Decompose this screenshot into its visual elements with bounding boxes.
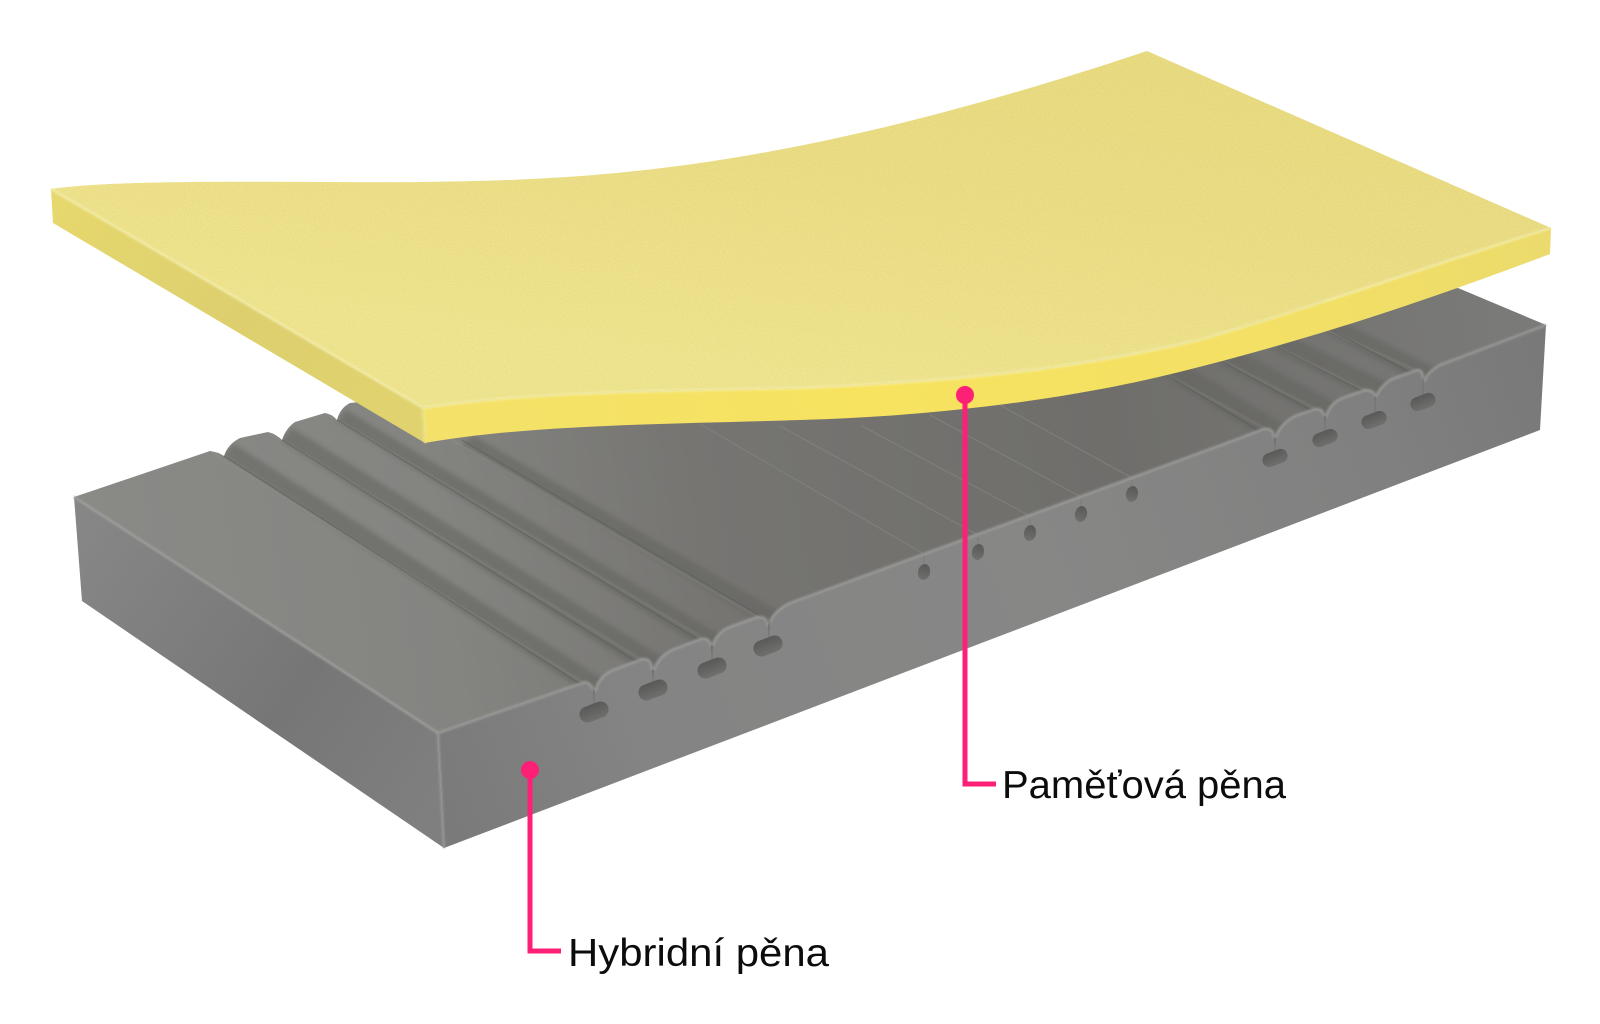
right slots <box>1260 391 1438 469</box>
leader line <box>530 770 561 951</box>
hybrid foam base <box>74 288 1546 848</box>
leader line <box>965 395 996 784</box>
base front face <box>438 325 1546 848</box>
marker dot <box>521 761 539 779</box>
sheet top surface <box>51 51 1551 408</box>
sheet front side <box>423 228 1551 443</box>
label: Hybridní pěna <box>568 932 829 975</box>
sheet left side <box>51 189 425 443</box>
callout: memory foam <box>956 386 1286 807</box>
groove shading <box>211 322 1436 698</box>
memory foam sheet <box>51 51 1551 443</box>
sheet edge highlights <box>51 189 1551 443</box>
slits above slots <box>594 380 1423 705</box>
base edge highlights <box>74 325 1546 848</box>
base top surface <box>74 288 1546 733</box>
base left face <box>74 497 444 848</box>
round holes <box>916 485 1140 581</box>
callout: hybrid foam <box>521 761 829 975</box>
label: Paměťová pěna <box>1002 764 1286 807</box>
hole slits <box>924 480 1132 565</box>
thin channel lines <box>700 405 1132 554</box>
left slots <box>577 633 785 725</box>
marker dot <box>956 386 974 404</box>
